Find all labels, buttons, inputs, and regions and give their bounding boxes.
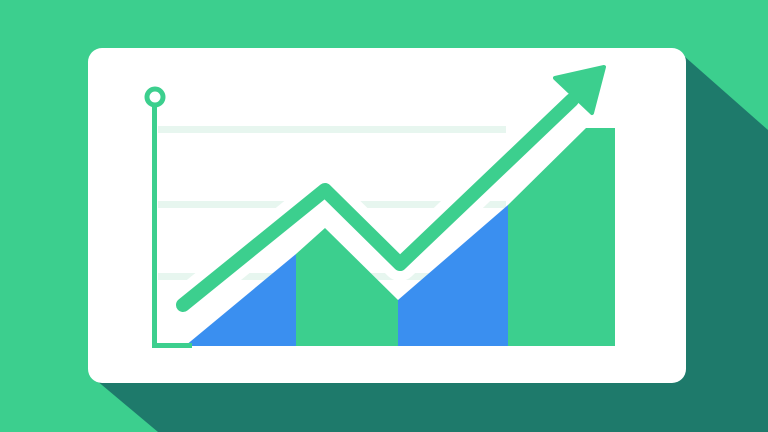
grid lines [158, 126, 506, 280]
card shadow [96, 56, 768, 432]
card panel [88, 48, 686, 383]
bars / area fills [185, 128, 615, 346]
axes [147, 89, 192, 348]
trend line with arrow [183, 67, 604, 305]
